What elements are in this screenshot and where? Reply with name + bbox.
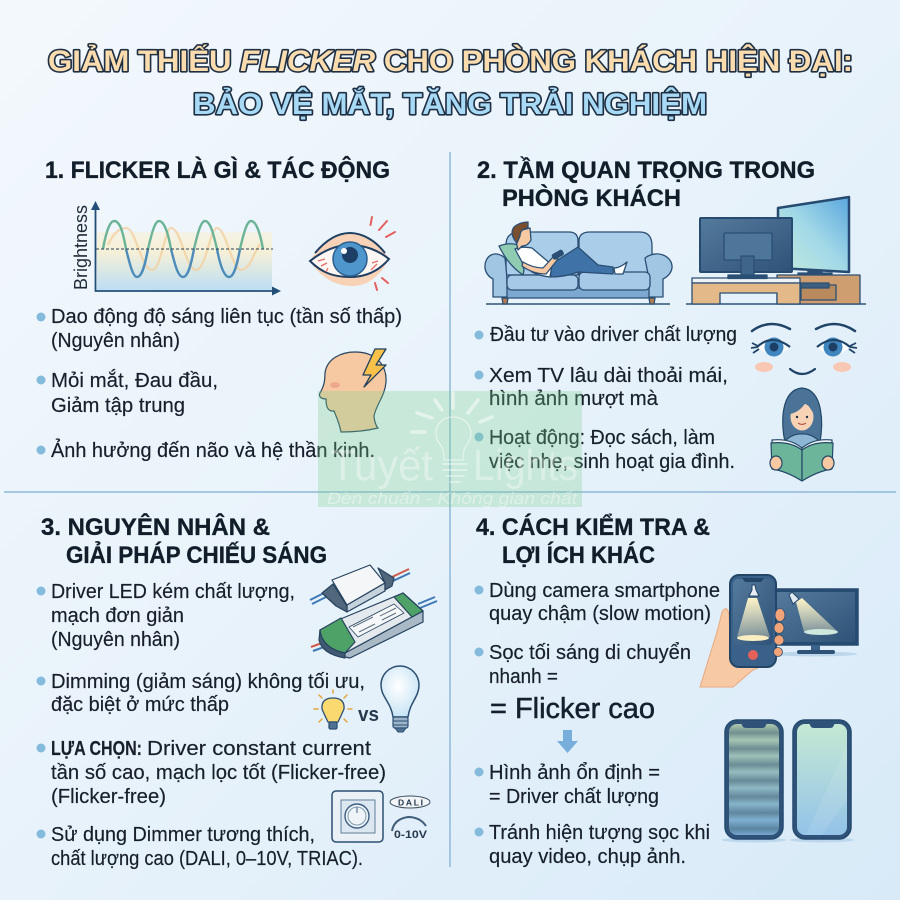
bullet text: testing: [474, 579, 720, 868]
bullet text: causes: mạch đơn giản: [51, 604, 184, 627]
icon: dim bulb versus bright bulb: vs: [358, 704, 379, 726]
bullet text: testing: quay chậm (slow motion): [489, 602, 711, 625]
title: GIẢM THIẾU FLICKER CHO PHÒNG KHÁCH HIỆN ĐẠI:: [48, 44, 853, 78]
icon: phone with flicker stripes: [722, 720, 786, 842]
panel: 2. living room importance: [474, 156, 866, 481]
bullet text: causes: đặc biệt ở mức thấp: [51, 693, 229, 716]
icon: dimmer switch with protocols: DALI: [398, 798, 423, 808]
watermark: Tuyết Lights: [318, 391, 582, 508]
chart: brightness wave: [70, 201, 281, 296]
bullet text: living room: việc nhẹ, sinh hoạt gia đình.: [489, 450, 735, 473]
panel: 3. causes and lighting solutions: [36, 513, 437, 870]
icon: irritated eye: [310, 217, 395, 290]
bullet text: testing: = Driver chất lượng: [489, 785, 659, 808]
heading 4: 4. CÁCH KIỂM TRA &: [476, 513, 710, 541]
bullet text: living room: [474, 323, 737, 473]
title: BẢO VỆ MẮT, TĂNG TRẢI NGHIỆM: [193, 87, 707, 121]
bullet text: causes: Sử dụng Dimmer tương thích,: [51, 823, 315, 846]
heading 2: [477, 156, 815, 212]
icon: phone with stable image: [790, 720, 854, 842]
bullet text: flicker: (Nguyên nhân): [51, 329, 180, 352]
bullet text: flicker: Mỏi mắt, Đau đầu,: [51, 369, 218, 392]
bullet text: flicker: Ảnh hưởng đến não và hệ thần kinh.: [51, 439, 375, 462]
heading 2: 2. TẦM QUAN TRỌNG TRONG: [477, 156, 815, 184]
watermark: Tuyết Lights: Lights: [473, 441, 578, 490]
icon: monitor with spotlight: [772, 589, 858, 656]
heading 4: LỢI ÍCH KHÁC: [502, 541, 655, 569]
icon: LED drivers: [310, 565, 437, 658]
icon: dimmer switch with protocols: [332, 791, 430, 842]
bullet text: causes: chất lượng cao (DALI, 0–10V, TRIAC).: [51, 847, 363, 870]
chart: brightness wave: Brightness: [70, 205, 91, 290]
bullet text: testing: Tránh hiện tượng sọc khi: [489, 821, 710, 844]
bullet text: testing: = Flicker cao: [490, 693, 655, 725]
bullet text: living room: hình ảnh mượt mà: [489, 387, 659, 410]
heading 3: GIẢI PHÁP CHIẾU SÁNG: [66, 540, 327, 569]
bullet text: flicker: Giảm tập trung: [51, 394, 185, 417]
bullet text: flicker: [36, 305, 402, 462]
watermark: Tuyết Lights: Tuyết: [330, 441, 433, 490]
bullet text: causes: Driver LED kém chất lượng,: [51, 580, 295, 603]
arrow: down: [557, 730, 578, 753]
bullet text: causes: Driver constant current: [147, 737, 371, 760]
bullet text: causes: Dimming (giảm sáng) không tối ưu,: [51, 670, 365, 693]
bullet text: causes: [36, 580, 386, 870]
bullet text: living room: Hoạt động: Đọc sách, làm: [489, 426, 715, 449]
panel: 4. testing and other benefits: [474, 513, 858, 868]
icon: dimmer switch with protocols: 0-10V: [394, 829, 428, 841]
icon: head with headache bolt: [319, 349, 386, 432]
bullet text: flicker: Dao động độ sáng liên tục (tần số thấp): [51, 305, 402, 328]
bullet text: causes: (Nguyên nhân): [51, 628, 180, 651]
icon: dim bulb versus bright bulb: [314, 666, 419, 732]
bullet text: testing: Hình ảnh ổn định =: [489, 761, 660, 784]
bullet text: testing: nhanh =: [489, 665, 558, 688]
icon: man on sofa: [485, 222, 672, 304]
bullet text: causes: LỰA CHỌN:: [51, 737, 142, 760]
bullet text: causes: (Flicker-free): [51, 785, 166, 808]
bullet text: living room: Xem TV lâu dài thoải mái,: [489, 364, 728, 387]
heading 3: 3. NGUYÊN NHÂN &: [41, 513, 270, 541]
heading 2: PHÒNG KHÁCH: [502, 184, 681, 212]
bullet text: living room: Đầu tư vào driver chất lượng: [490, 323, 737, 346]
panel: 1. flicker: [36, 156, 402, 462]
bullet text: testing: Dùng camera smartphone: [489, 579, 720, 602]
icon: happy face eyes: [751, 324, 857, 374]
bullet text: testing: quay video, chụp ảnh.: [489, 845, 686, 868]
bullet text: testing: Sọc tối sáng di chuyển: [489, 641, 691, 664]
watermark: Tuyết Lights: Đèn chuẩn - Không gian chất: [327, 489, 578, 508]
title: [48, 44, 853, 121]
heading 4: [476, 513, 710, 569]
heading 1: 1. FLICKER LÀ GÌ & TÁC ĐỘNG: [45, 156, 390, 184]
icon: girl reading: [770, 388, 834, 481]
bullet text: causes: tần số cao, mạch lọc tốt (Flicker-free): [51, 761, 386, 784]
icon: televisions and furniture: [686, 197, 866, 304]
heading 3: [41, 513, 327, 569]
icon: hand holding phone: [700, 575, 785, 687]
